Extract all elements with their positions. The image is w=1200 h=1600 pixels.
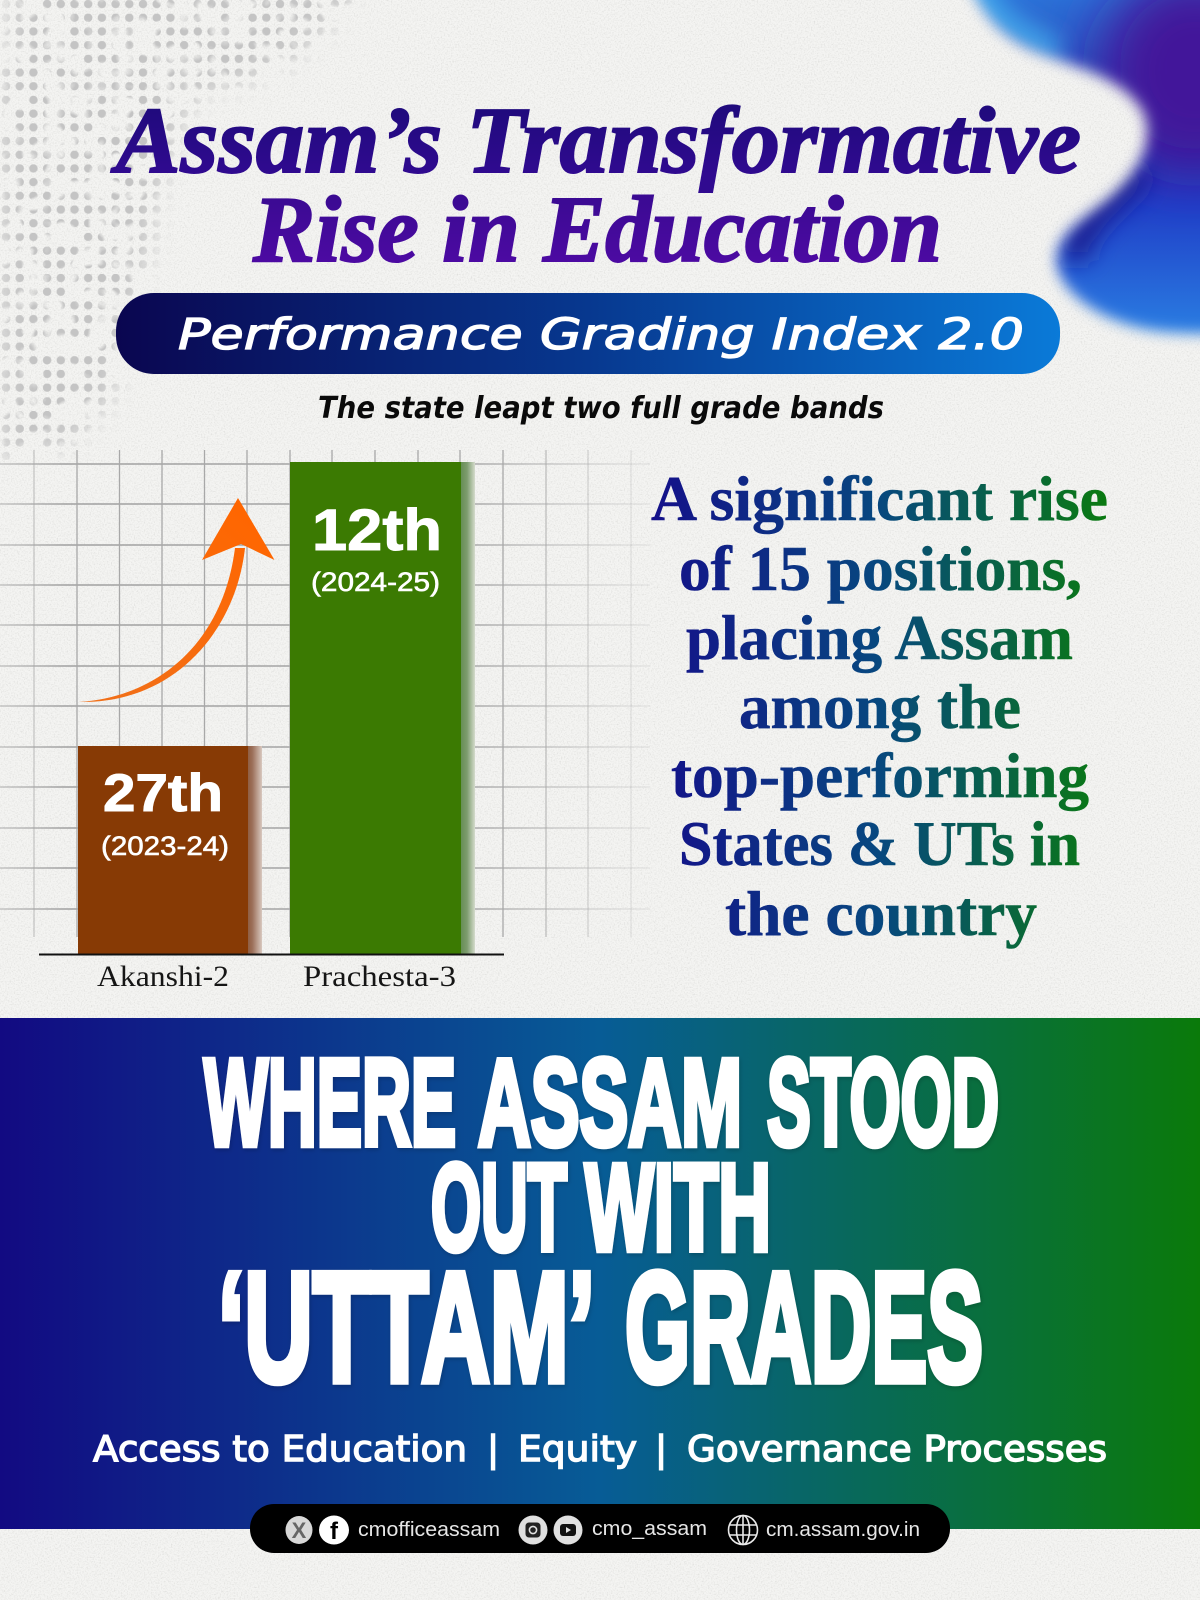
callout: rise of 15 positions: of 15 positions, <box>679 534 1082 604</box>
heading: where Assam stood out: ‘UTTAM’ <box>218 1241 595 1415</box>
bar: Akanshi-2 <box>78 746 262 954</box>
text: grade categories: Access to Education <box>93 1429 467 1470</box>
bar: Prachesta-3: (2024-25) <box>311 567 440 597</box>
axis line <box>39 954 504 956</box>
axis labels: Prachesta-3 <box>303 960 456 993</box>
bar: Akanshi-2: (2023-24) <box>101 831 229 861</box>
tagline: The state leapt two full grade bands <box>318 391 884 426</box>
icon: Facebook: f <box>330 1518 339 1545</box>
panel: Uttam grades band <box>0 1018 1200 1529</box>
bar: Prachesta-3 <box>290 462 475 954</box>
heading: where Assam stood out: OUT <box>431 1140 567 1277</box>
callout: rise of 15 positions: placing Assam <box>686 603 1073 673</box>
subtitle pill: Performance Grading Index 2.0: Performance Grading Index 2.0 <box>178 310 1024 360</box>
icon: Instagram <box>518 1516 548 1544</box>
title <box>111 89 1081 282</box>
callout: rise of 15 positions: among the <box>739 672 1021 742</box>
heading: where Assam stood out: STOOD <box>767 1035 999 1172</box>
icon: globe <box>728 1516 758 1544</box>
heading: where Assam stood out: WHERE <box>204 1035 456 1172</box>
icon: Facebook <box>319 1516 349 1545</box>
icon: X: X <box>292 1518 307 1543</box>
icon: rising arrow <box>79 498 274 702</box>
title: Rise in Education <box>252 178 942 282</box>
text: grade categories: | <box>655 1429 667 1470</box>
handle: website: cm.assam.gov.in <box>766 1519 920 1541</box>
callout: rise of 15 positions <box>651 464 1108 949</box>
icon: YouTube <box>554 1516 582 1544</box>
heading: where Assam stood out <box>204 1035 999 1415</box>
text: grade categories <box>93 1429 1107 1470</box>
title: Assam’s Transformative <box>111 89 1081 193</box>
bar chart <box>0 450 650 993</box>
callout: rise of 15 positions: the country <box>725 879 1037 949</box>
text: grade categories: | <box>487 1429 499 1470</box>
bar: Akanshi-2: 27th <box>103 764 223 823</box>
callout: rise of 15 positions: A significant rise <box>651 464 1108 534</box>
heading: where Assam stood out: WITH <box>585 1140 771 1277</box>
text: grade categories: Governance Processes <box>687 1429 1107 1470</box>
bar: Prachesta-3: 12th <box>312 498 442 563</box>
callout: rise of 15 positions: top-performing <box>671 741 1089 811</box>
handle: cmo_assam: cmo_assam <box>592 1518 707 1540</box>
icon: X <box>286 1516 312 1544</box>
handle: cmofficeassam: cmofficeassam <box>358 1519 500 1541</box>
callout: rise of 15 positions: States & UTs in <box>679 809 1080 879</box>
text: grade categories: Equity <box>518 1429 637 1470</box>
footer: social handles <box>250 1504 950 1553</box>
decorative blob: top right <box>965 0 1200 346</box>
subtitle pill: Performance Grading Index 2.0 <box>116 293 1060 374</box>
axis labels: Akanshi-2 <box>97 960 229 993</box>
axis labels <box>97 960 456 993</box>
heading: where Assam stood out: ASSAM <box>478 1035 742 1172</box>
